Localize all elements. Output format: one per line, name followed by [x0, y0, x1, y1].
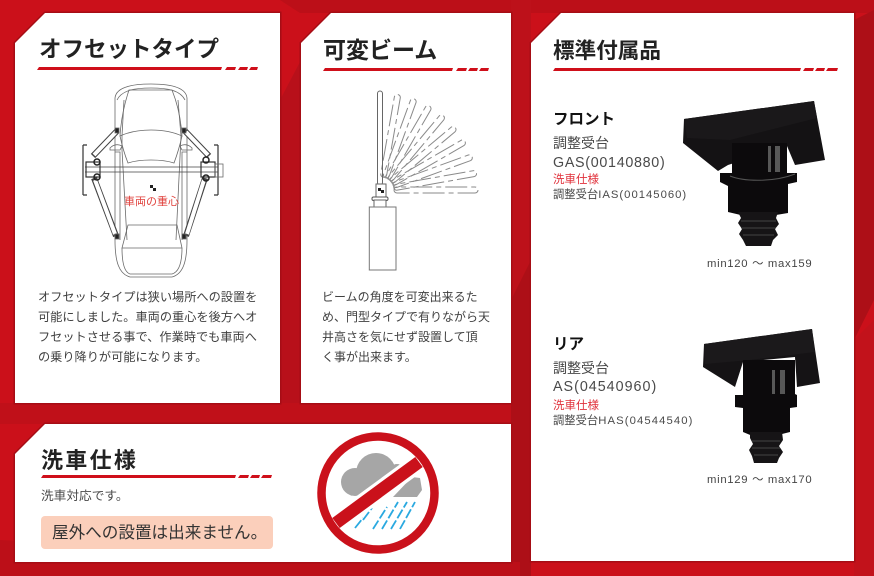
text: front: 調整受台IAS(00145060) — [553, 189, 687, 201]
heading: offset type: オフセットタイプ — [39, 37, 219, 62]
icon: no rain — [317, 432, 439, 554]
label: centre of gravity: 車両の重心 — [124, 196, 179, 208]
text: rear — [553, 336, 694, 427]
text: rear: AS(04540960) — [553, 379, 657, 395]
text: front: GAS(00140880) — [553, 155, 665, 171]
heading underline — [323, 68, 489, 71]
label: front range: min120 ～ max159 — [707, 258, 812, 270]
posts and beam — [83, 145, 218, 195]
label: rear range: min129 ～ max170 — [707, 474, 812, 486]
panel: standard accessories — [530, 12, 856, 562]
heading underline — [37, 67, 258, 70]
description text: オフセットタイプは狭い場所への設置を — [38, 290, 257, 304]
description text — [38, 290, 257, 364]
diagram: beam angle fan — [368, 90, 478, 270]
callout: no outdoor installation: 屋外への設置は出来ません。 — [52, 523, 267, 542]
text: front: 洗車仕様 — [553, 174, 599, 186]
description text: め、門型タイプで有りながら天 — [322, 310, 490, 324]
heading underline — [553, 68, 838, 71]
text: rear: リア — [553, 336, 584, 353]
lift arms — [93, 131, 209, 236]
description text: 可能にしました。車両の重心を後方へオ — [38, 310, 257, 324]
text: car wash compatible: 洗車対応です。 — [41, 489, 129, 503]
heading: car wash: 洗車仕様 — [41, 448, 138, 473]
photo: front adjuster — [683, 101, 825, 246]
heading: standard accessories: 標準付属品 — [553, 38, 661, 63]
photo: rear adjuster — [703, 329, 820, 463]
callout: no outdoor installation — [41, 516, 273, 549]
text: front: 調整受台 — [553, 135, 609, 151]
panel: offset type — [14, 12, 282, 404]
heading underline — [41, 475, 272, 478]
description text: の乗り降りが可能になります。 — [38, 350, 207, 364]
description text: 井高さを気にせず設置して頂 — [322, 330, 478, 344]
diagram: car top view with lift arms — [82, 84, 224, 278]
description text: ビームの角度を可変出来るた — [322, 290, 478, 304]
description text: く事が出来ます。 — [322, 350, 417, 364]
text: rear: 洗車仕様 — [553, 400, 599, 412]
text: rear: 調整受台HAS(04544540) — [553, 415, 694, 427]
text: front: フロント — [553, 111, 615, 128]
description text: フセットさせる事で、作業時でも車両へ — [38, 330, 257, 344]
heading: variable beam: 可変ビーム — [323, 37, 437, 63]
panel: variable beam — [300, 12, 512, 404]
text: front — [553, 111, 687, 201]
text: rear: 調整受台 — [553, 360, 609, 376]
panel: car wash — [14, 422, 512, 564]
description text — [322, 290, 490, 364]
